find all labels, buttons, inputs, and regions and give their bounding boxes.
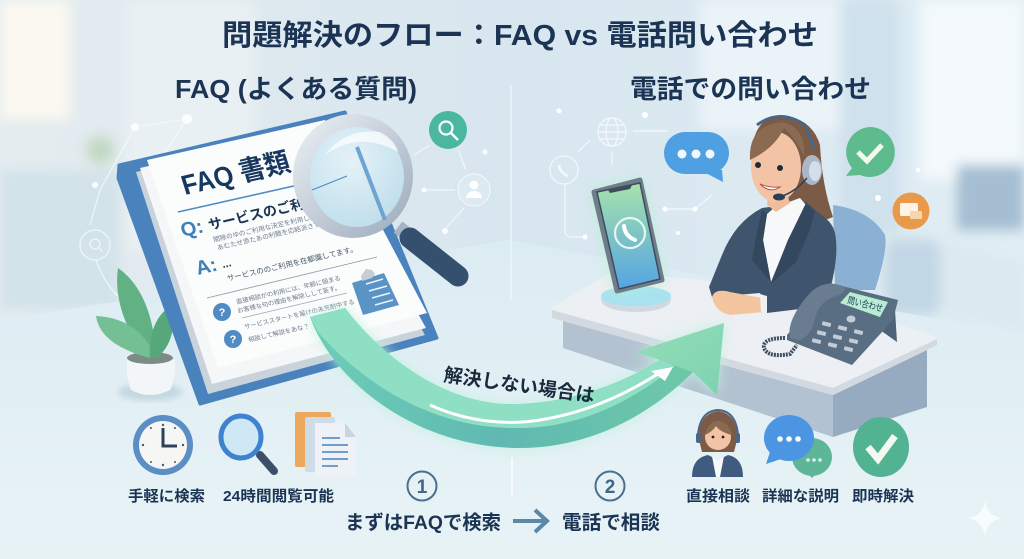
labels: FAQ benefits: 手軽に検索	[128, 487, 205, 505]
icon: sparkle	[968, 500, 1002, 536]
question text: サービスのご利用	[206, 192, 320, 233]
illustration: agent	[709, 115, 836, 315]
question text: あむたせ添たあの利競を応結派さす	[216, 220, 322, 252]
question text: 定波には、	[321, 201, 353, 215]
icon: agent avatar	[692, 410, 743, 477]
icon: green search	[429, 111, 467, 149]
title: 問題解決のフロー：FAQ vs 電話問い合わせ	[222, 19, 818, 52]
step 1 number: 1	[417, 477, 428, 498]
icon: clipboard	[352, 269, 399, 315]
question list	[213, 273, 356, 348]
question list: ?	[219, 307, 226, 319]
icon: green check circle	[853, 417, 909, 477]
icon: blue chat bubble	[664, 132, 729, 182]
question text	[178, 192, 353, 252]
icon: chat bubbles	[764, 415, 832, 478]
illustration: desk telephone	[764, 283, 898, 365]
illustration: smartphone on stand	[590, 177, 671, 312]
labels: phone benefits: 詳細な説明	[762, 487, 839, 505]
icon: orange chat circle	[892, 192, 930, 230]
illustration: magnifying glass	[293, 114, 458, 276]
question list: ?	[230, 334, 237, 346]
icon: person in circle	[458, 174, 490, 206]
arrow: FAQ to phone flow	[310, 308, 724, 448]
step 1 text: まずはFAQで検索	[345, 512, 501, 534]
question text: Q:	[178, 216, 206, 242]
network decoration: left	[80, 114, 488, 300]
illustration: desk telephone: 問い合わせ	[846, 294, 884, 315]
labels: phone benefits: 即時解決	[852, 487, 914, 505]
question list: 相談して解説をあな？	[247, 321, 311, 344]
arrow label: 解決しない場合は	[442, 364, 596, 407]
labels: phone benefits	[686, 487, 914, 505]
question list: サービススタートを届けの未充耐中する	[243, 297, 356, 331]
icon: green check bubble	[846, 127, 895, 177]
illustration: plant	[96, 268, 182, 401]
answer text: サービスののご利用を在都識してます。	[226, 243, 359, 283]
answer text: ...	[220, 257, 233, 271]
step 1 number	[408, 472, 436, 500]
step 2 text: 電話で相談	[562, 512, 660, 534]
illustration: desk	[552, 272, 937, 437]
heading: FAQ document title: FAQ 書類	[177, 146, 294, 201]
icon: magnifier	[221, 416, 274, 471]
step 2 number: 2	[605, 477, 615, 498]
icon: documents	[295, 412, 356, 477]
illustration: chair	[833, 205, 886, 290]
icon: clock	[133, 415, 193, 475]
question text: 間隙のゆのご利用な決定を利用した	[212, 212, 317, 244]
labels: phone benefits: 直接相談	[686, 487, 750, 505]
network decoration: right	[550, 108, 920, 240]
labels: FAQ benefits: 24時間閲覧可能	[223, 487, 334, 505]
illustration: FAQ document	[118, 112, 437, 404]
heading: FAQ: FAQ (よくある質問)	[175, 74, 417, 104]
answer text: A:	[193, 254, 220, 280]
heading: phone inquiry: 電話での問い合わせ	[630, 74, 871, 104]
question list: お客様な句の理由を解除しして妄す。	[236, 283, 342, 315]
question list: 直接相談がの利用には、年齢に個まる	[235, 273, 342, 306]
labels: FAQ benefits	[128, 487, 334, 505]
arrow: step 1 to step 2	[513, 510, 547, 532]
step 2 number	[596, 472, 624, 500]
